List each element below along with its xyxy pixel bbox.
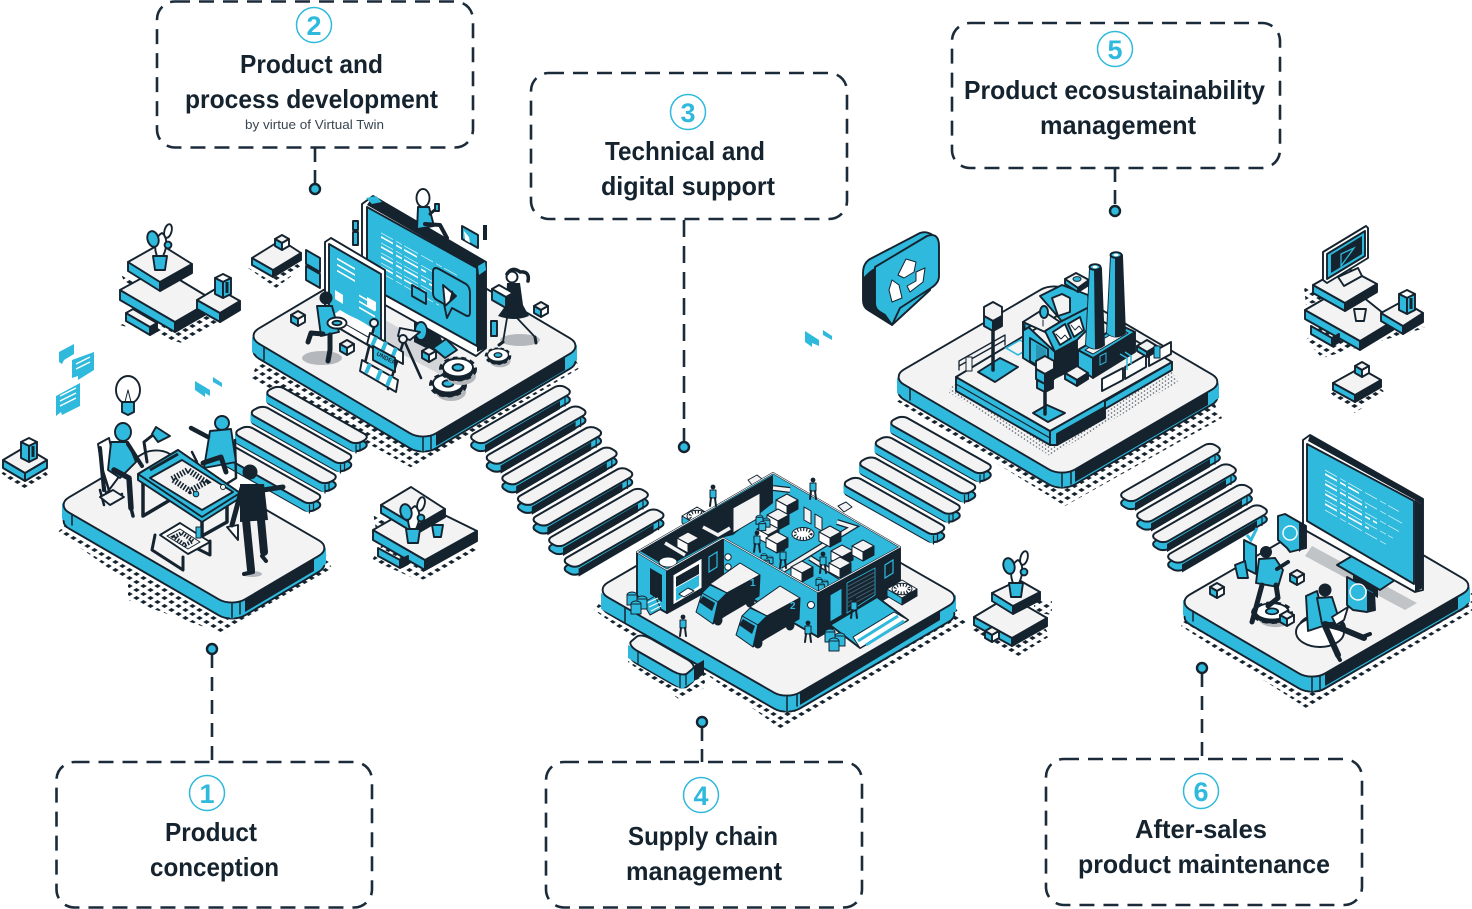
floor plan	[637, 473, 900, 595]
equipment units	[1065, 340, 1160, 386]
lower plate	[120, 268, 213, 332]
chimney block	[1078, 325, 1135, 378]
icon: server box	[215, 274, 231, 298]
small cubes	[1210, 570, 1304, 626]
partition walls	[665, 488, 853, 577]
icon: large monitor	[1303, 435, 1423, 598]
warehouse	[637, 473, 900, 637]
recycling arrows	[889, 259, 925, 302]
icon: gear bubble	[1278, 514, 1306, 552]
icon: cup	[432, 525, 443, 537]
callout 1: product conception	[56, 644, 372, 908]
dashed frame	[546, 762, 862, 908]
heading	[964, 75, 1266, 140]
panel: small pedestal right	[1333, 362, 1381, 402]
heading	[626, 821, 782, 886]
desk lamp	[144, 427, 170, 462]
number badge: 4	[693, 781, 709, 811]
shadows	[302, 320, 540, 385]
callout 4: supply chain management	[546, 717, 862, 908]
icon: bar chart with check	[1235, 528, 1257, 578]
icon: clock bubble	[1347, 577, 1375, 612]
person: man on bean bag with laptop	[1296, 584, 1370, 660]
callout 3: technical and digital support	[531, 73, 847, 452]
icon: gears	[432, 349, 511, 401]
tower left	[984, 302, 1002, 370]
heading: conception	[150, 852, 279, 882]
stairs: supply chain to ecosustainability	[842, 415, 994, 544]
connector	[701, 727, 703, 762]
person: seated woman	[98, 423, 142, 516]
icon: side tiles	[306, 221, 497, 336]
factory deck	[956, 305, 1172, 445]
person: woman sitting on monitor	[416, 189, 447, 238]
shadow under standing man	[242, 571, 262, 577]
barrels	[627, 592, 845, 651]
icon: video bubble	[433, 268, 470, 318]
callout 6: after-sales product maintenance	[1046, 663, 1362, 905]
heading: Technical and	[605, 136, 765, 166]
work table	[138, 450, 240, 536]
number badge: 6	[1193, 777, 1209, 807]
icon: cup	[1354, 309, 1366, 321]
platform base	[246, 241, 583, 456]
callout 5: product ecosustainability management	[952, 23, 1280, 216]
icon: recycling speech bubble	[863, 232, 939, 325]
dashed frame	[1046, 759, 1362, 905]
platform base	[56, 446, 332, 623]
connector dot	[310, 184, 320, 194]
small drafting stand	[152, 523, 210, 570]
heading: product maintenance	[1078, 849, 1330, 879]
small side platform	[627, 633, 704, 690]
monitor code lines	[1325, 470, 1402, 553]
person: woman with box	[492, 269, 536, 345]
number badge: 1	[199, 779, 215, 809]
icon: plant	[146, 223, 173, 270]
icon: star tile	[412, 285, 426, 304]
panel: pedestals right of warehouse	[974, 550, 1047, 646]
connector dot	[207, 644, 217, 654]
dashed frame	[157, 2, 473, 148]
number badge	[670, 94, 706, 130]
person: woman stepping on gear	[1252, 546, 1288, 622]
panel: platform 3 supply chain	[595, 473, 962, 716]
dotted floor shadows	[0, 258, 1472, 730]
icon: under construction barrier: UNDER	[375, 351, 397, 367]
heading: management	[1040, 110, 1196, 140]
truck 2: 2	[790, 601, 796, 612]
number badge	[296, 8, 332, 42]
platform base	[1177, 507, 1472, 696]
number badge	[190, 776, 224, 810]
person: running man	[308, 292, 346, 361]
icon: under construction barrier	[360, 319, 421, 392]
fan unit	[887, 580, 917, 605]
heading: After-sales	[1135, 814, 1267, 844]
heading: management	[626, 856, 782, 886]
number badge	[1184, 774, 1218, 808]
connector dot	[1110, 206, 1120, 216]
connector dot	[1197, 663, 1207, 673]
main factory building	[1023, 285, 1097, 378]
panel: pedestals upper right with monitor	[1305, 226, 1423, 350]
panel: platform 6 after-sales	[1177, 435, 1472, 696]
loading ramp	[830, 597, 908, 648]
heading	[601, 136, 775, 201]
heading	[185, 49, 438, 132]
heading: Supply chain	[628, 821, 778, 851]
connector	[211, 654, 213, 762]
heading: by virtue of Virtual Twin	[245, 117, 384, 132]
icon: video monitor	[1323, 226, 1368, 286]
truck 1: 1	[750, 578, 756, 589]
number badge	[1098, 32, 1132, 66]
crates and fan	[659, 494, 874, 591]
monitor shadow	[1305, 546, 1417, 610]
heading	[150, 817, 279, 882]
workers	[680, 478, 857, 642]
connector	[1201, 673, 1203, 759]
heading: Product and	[240, 49, 383, 79]
panel: pedestals lower middle-left	[373, 487, 477, 570]
platform base	[891, 282, 1225, 492]
person: seated man	[191, 416, 236, 488]
heading	[1078, 814, 1330, 879]
dashed frame	[531, 73, 847, 219]
delivery trucks	[696, 563, 800, 648]
heading: process development	[185, 84, 438, 114]
heading: Product ecosustainability	[964, 75, 1266, 105]
connector	[683, 220, 685, 442]
number badge: 5	[1107, 35, 1123, 65]
dashed frame	[56, 762, 372, 908]
icon: tablet	[325, 238, 385, 351]
small side block	[126, 309, 157, 335]
icon: light bulb	[116, 376, 140, 415]
monitor code lines	[381, 233, 462, 318]
fences	[959, 335, 1171, 391]
icon: chat bubbles	[56, 344, 222, 416]
panel: platform 5 ecosustainability	[891, 252, 1225, 492]
fine dotted deck shadow	[948, 368, 1178, 456]
number badge: 3	[680, 98, 696, 128]
connector	[1114, 168, 1116, 206]
person: standing man	[227, 464, 283, 574]
callout 2: product and process development	[157, 2, 473, 194]
roof unit	[1065, 273, 1089, 292]
stairs: ecosustainability to after-sales	[1118, 442, 1270, 572]
panel: platform 1 conception	[56, 344, 332, 623]
panel: small pedestal with cube	[252, 235, 301, 277]
platform base	[595, 488, 962, 716]
icon: small floating bubbles	[805, 330, 832, 347]
stairs: development to supply chain	[468, 384, 667, 577]
heading: Product	[165, 817, 257, 847]
tower right	[1036, 356, 1054, 414]
icon: gear under woman	[1254, 603, 1292, 627]
tablet text lines	[337, 259, 375, 317]
stairs: conception to development	[218, 385, 370, 513]
back wall doors	[804, 507, 822, 531]
heading: digital support	[601, 171, 775, 201]
connector dot	[679, 442, 689, 452]
plant plate	[128, 244, 192, 291]
panel: lone small pedestal left	[3, 438, 47, 481]
dashed frame	[952, 23, 1280, 168]
rooftop fan units behind warehouse	[682, 475, 852, 532]
small cubes	[291, 302, 548, 362]
connector dot	[697, 717, 707, 727]
entry steps	[643, 596, 661, 615]
monitor stand	[414, 322, 446, 356]
connector	[314, 148, 316, 184]
number badge: 2	[306, 11, 322, 41]
right block	[197, 288, 240, 322]
panel: small pedestals upper left	[120, 223, 240, 335]
number badge	[684, 778, 718, 812]
outer walls	[637, 552, 667, 613]
icon: big monitor	[362, 196, 486, 358]
panel: platform 2 development	[246, 189, 583, 456]
chimneys	[1086, 252, 1125, 349]
